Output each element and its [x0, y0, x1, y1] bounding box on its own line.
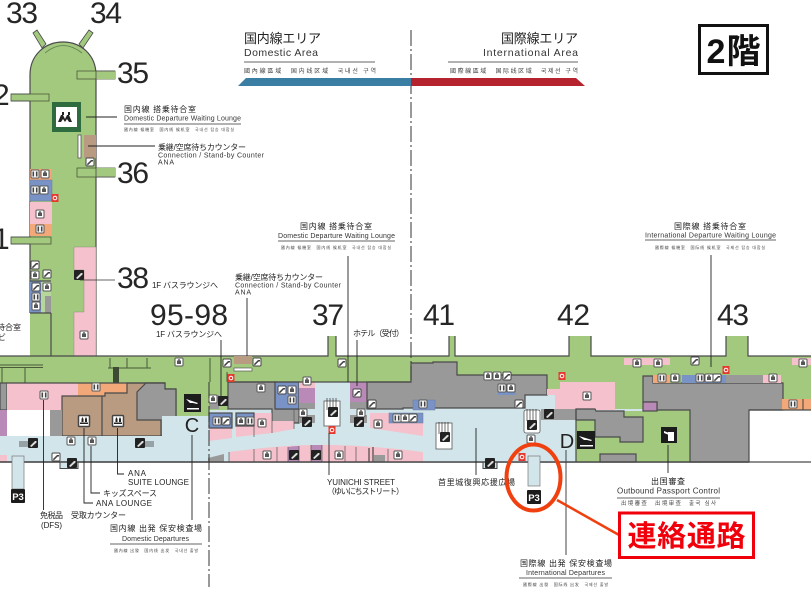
label: ANA lounge	[84, 428, 152, 508]
label: international waiting lounge: International Departure Waiting Lounge	[645, 232, 776, 240]
gate numbers: 37	[312, 299, 344, 332]
label: pier waiting lounge: 國內線 候機室 国内线 候机室 국내선 탑승 대합실	[124, 126, 234, 132]
header: domestic area	[238, 31, 411, 86]
arrow: circle to callout	[557, 500, 619, 535]
label: pickup counter: 受取カウンター	[71, 510, 126, 520]
callout: connecting passage circle	[506, 444, 560, 510]
bridge P3 left: P3	[12, 492, 24, 503]
label: left lounge cropped	[0, 322, 21, 342]
label: international departures: 國際線 出發 国际线 出发 국제선 출발	[523, 581, 608, 587]
central block: shops and Yuinichi Street	[208, 362, 643, 468]
label: hotel reception: ホテル（受付）	[353, 328, 404, 338]
label: passport control: 出国審査	[651, 476, 685, 486]
label: duty free: (DFS)	[41, 521, 62, 530]
callout: connecting passage label: 連絡通路	[628, 520, 746, 553]
header: international area: 国際線エリア	[501, 31, 578, 46]
header: domestic area: Domestic Area	[244, 47, 318, 59]
label: passport control: 出境審查 出境审查 출국 심사	[621, 499, 716, 507]
label: duty free: 免税品	[40, 510, 63, 520]
label: transfer counter pier: ANA	[158, 160, 174, 166]
icon: domestic departures airplane	[184, 394, 201, 412]
bridge P3 right: P3	[528, 493, 540, 504]
gate numbers: 43	[717, 299, 749, 332]
label: ANA suite lounge: ANA	[128, 469, 147, 478]
label: ANA lounge: ANA LOUNGE	[96, 499, 152, 508]
bridge P3 left	[11, 456, 25, 503]
label: international departures: 国際線 出発 保安検査場	[520, 558, 612, 568]
label: pier waiting lounge: Domestic Departure Waiting Lounge	[124, 116, 241, 122]
label: pier waiting lounge: 国内線 搭乗待合室	[124, 104, 196, 114]
label: transfer counter main: Connection / Stand-by Counter	[235, 282, 342, 290]
label: main domestic waiting lounge: Domestic Departure Waiting Lounge	[278, 233, 395, 240]
gate numbers: 35	[117, 57, 149, 90]
icon: passport control	[661, 427, 677, 443]
boarding bridges 33 and 34	[33, 30, 93, 48]
gate numbers: 95-98	[150, 299, 228, 332]
label: transfer counter main	[235, 272, 342, 362]
label: Yuinichi Street: （ゆいにちストリート）	[327, 487, 404, 496]
bridge P3 right	[527, 456, 541, 504]
label: Yuinichi Street: YUINICHI STREET	[327, 478, 395, 487]
gate numbers: 41	[423, 299, 455, 332]
label: duty free	[40, 400, 63, 530]
label: domestic departures: 国内線 出発 保安検査場	[110, 523, 202, 533]
label: transfer counter pier: Connection / Stand-by Counter	[158, 152, 265, 160]
label: international waiting lounge	[645, 221, 776, 367]
main terminal green band	[0, 336, 811, 462]
label: main domestic waiting lounge: 国内線 搭乗待合室	[300, 221, 372, 231]
gate numbers	[0, 0, 749, 332]
label: gates 95-98 bus lounge	[156, 330, 222, 398]
label: Shuri Castle plaza	[438, 428, 515, 487]
label: main domestic waiting lounge	[278, 221, 395, 382]
label: gates 95-98 bus lounge: 1F バスラウンジへ	[156, 330, 222, 339]
icon: international departures airplane	[577, 431, 595, 449]
icon: domestic waiting lounge	[52, 102, 81, 132]
label: transfer counter main: ANA	[235, 290, 251, 296]
header: international area: 國際線區域 国际线区域 국제선 구역	[450, 67, 578, 75]
label: passport control	[617, 445, 720, 507]
label: Shuri Castle plaza: 首里城復興応援広場	[438, 477, 515, 487]
pink lower shops	[229, 445, 423, 462]
right block: international side	[0, 358, 811, 462]
pier shops	[30, 135, 96, 356]
pink upper shops	[209, 413, 423, 441]
label: gate 38 bus lounge: 1F バスラウンジへ	[152, 281, 218, 290]
header: domestic area: 国内線エリア	[244, 31, 321, 46]
label: international departures: International Departures	[526, 570, 606, 577]
left block: lounges and shops	[0, 383, 811, 468]
label: passport control: Outbound Passport Control	[617, 486, 720, 496]
label: kids space	[91, 446, 157, 498]
label: transfer counter pier	[88, 142, 265, 166]
divider: domestic / international	[410, 30, 412, 380]
gate numbers: 36	[117, 157, 149, 190]
north pier (gates 31-38)	[11, 30, 115, 356]
checkpoint letter C: C	[185, 415, 199, 437]
label: pier waiting lounge	[86, 104, 241, 132]
label: ANA suite lounge	[118, 428, 189, 487]
header: international area: International Area	[483, 47, 578, 59]
label: international waiting lounge: 国際線 搭乗待合室	[674, 221, 746, 231]
label: main domestic waiting lounge: 國內線 候機室 国内线 候机室 국내선 탑승 대합실	[281, 244, 391, 250]
label: ANA suite lounge: SUITE LOUNGE	[128, 478, 189, 487]
floor badge 2F: 2階	[706, 33, 760, 71]
label: kids space: キッズスペース	[103, 488, 157, 498]
label: transfer counter pier: 乗継/空席待ちカウンター	[158, 142, 246, 152]
callout: connecting passage label	[620, 513, 754, 558]
floor badge 2F	[700, 26, 768, 74]
label: international waiting lounge: 國際線 候機室 国际线 候机室 국제선 탑승 대합실	[655, 244, 765, 250]
label: domestic departures: Domestic Departures	[122, 536, 190, 543]
header: international area	[411, 31, 585, 86]
label: transfer counter main: 乗継/空席待ちカウンター	[235, 272, 323, 282]
label: domestic departures: 國內線 出發 国内线 出发 국내선 출발	[114, 547, 198, 553]
gate numbers: 42	[557, 299, 590, 332]
gate stubs	[11, 71, 115, 244]
gate numbers: 38	[117, 262, 149, 295]
label: gate 38 bus lounge	[80, 280, 218, 290]
icons: facilities	[28, 158, 807, 468]
header: domestic area: 國內線區域 国内线区域 국내선 구역	[244, 67, 376, 75]
label: international departures	[519, 450, 612, 587]
label: domestic departures	[110, 435, 202, 553]
label: Yuinichi Street	[327, 433, 404, 496]
escalator boxes	[324, 401, 540, 449]
label: hotel reception	[353, 328, 404, 386]
checkpoint letter D: D	[560, 431, 574, 453]
